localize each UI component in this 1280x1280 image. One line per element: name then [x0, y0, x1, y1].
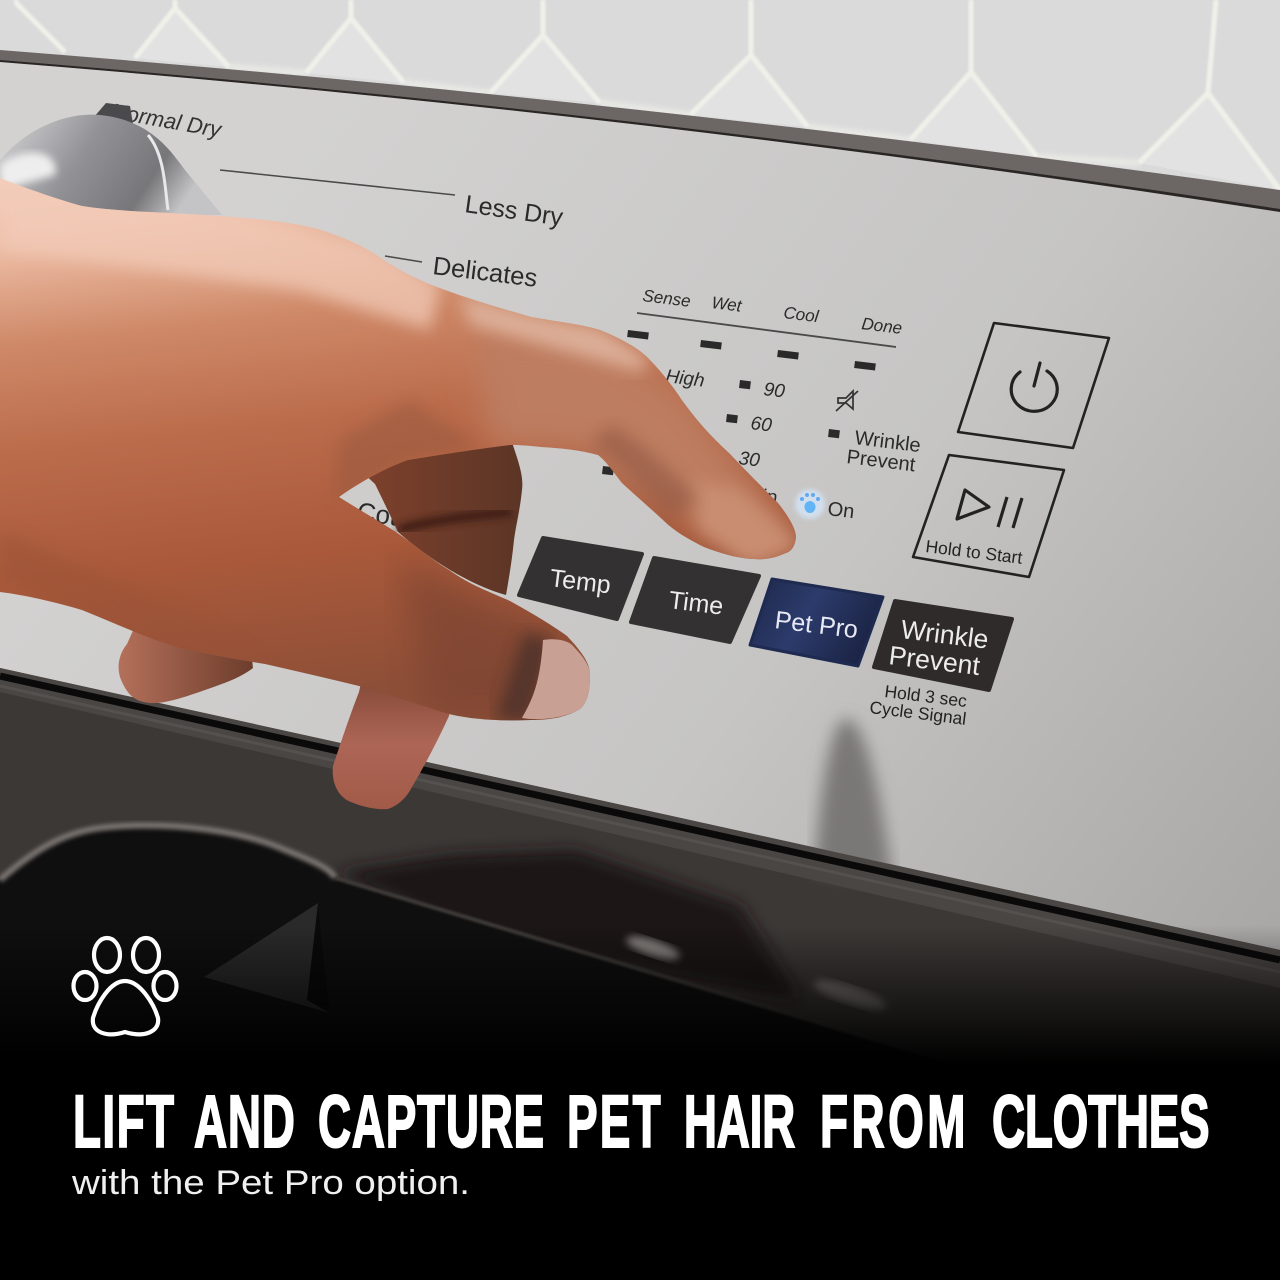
thumb nail: [522, 639, 590, 719]
button: hold to start: [913, 455, 1064, 577]
icon: paw print: [74, 938, 176, 1034]
console label: status indicators: Sense: [642, 286, 692, 311]
console label: status indicators: in: [761, 486, 779, 509]
button: hold to start: Hold to Start: [925, 536, 1024, 568]
button: Wrinkle Prevent: [874, 601, 1012, 690]
console label: status indicators: On: [826, 498, 856, 523]
icon: chrome cycle dial: [0, 103, 222, 215]
button: Pet Pro: Pet Pro: [773, 606, 859, 644]
console label: hold 3 sec cycle signal: Hold 3 sec: [884, 681, 968, 711]
button: Time: [631, 558, 759, 642]
console label: cycle names: [109, 98, 565, 537]
icon: play pause: [957, 490, 1022, 528]
panel: silver dryer control console: [0, 50, 1280, 950]
console label: status indicators: Cool: [783, 303, 821, 326]
console label: status indicators: 60: [749, 413, 773, 437]
hand and index finger: [0, 178, 796, 720]
console label: status indicators: Wet: [711, 293, 744, 316]
console label: status indicators: Prevent: [845, 446, 917, 476]
button: Pet Pro: [750, 579, 883, 666]
title: HAIR: [684, 1081, 795, 1164]
console label: status indicators: 30: [737, 448, 761, 472]
shadow on console below the buttons: [815, 718, 892, 880]
icon: power symbol: [1011, 363, 1057, 411]
lower bezel strip: [0, 668, 1280, 988]
button: Temp: [519, 538, 642, 619]
bottom dark gradient band: [0, 925, 1280, 1065]
finger: curled little finger: [119, 615, 253, 703]
dark appliance base: [0, 640, 1280, 1280]
button: Wrinkle Prevent: Prevent: [887, 640, 982, 681]
title: AND: [194, 1081, 296, 1164]
finger: middle finger behind: [360, 425, 522, 595]
hand shading: [0, 170, 800, 725]
subtitle: with the Pet Pro option.: [71, 1164, 470, 1202]
finger: lower finger: [333, 665, 455, 809]
background: white hexagon tile wall: [0, 0, 1280, 240]
console label: status indicators: [602, 286, 922, 523]
button: Time: Time: [667, 586, 725, 621]
photo: pointing hand: [0, 170, 800, 809]
console label: status indicators: Done: [861, 314, 903, 338]
console label: status indicators: Wrinkle: [853, 427, 922, 457]
console label: cycle names: Cotton: [355, 496, 435, 537]
button: Temp: Temp: [548, 564, 612, 599]
open lid tray and reflections: [0, 826, 1280, 1220]
title: CAPTURE: [318, 1081, 545, 1164]
console label: status indicators: 90: [762, 379, 786, 403]
title: PET: [567, 1081, 663, 1164]
console label: status indicators: High: [664, 366, 706, 392]
console label: cycle names: Less Dry: [463, 190, 565, 232]
title: FROM: [820, 1081, 969, 1164]
button: Wrinkle Prevent: Wrinkle: [899, 614, 990, 655]
icon: glowing blue paw indicator: [795, 489, 825, 519]
console label: cycle names: Normal Dry: [109, 98, 225, 143]
icon: muted sound: [836, 391, 858, 411]
console label: cycle names: Delicates: [431, 252, 539, 293]
button: power: [958, 323, 1109, 448]
console label: hold 3 sec cycle signal: Cycle Signal: [869, 697, 968, 729]
console label: hold 3 sec cycle signal: [869, 681, 968, 729]
title: CLOTHES: [992, 1081, 1209, 1164]
title: LIFT: [73, 1081, 175, 1164]
